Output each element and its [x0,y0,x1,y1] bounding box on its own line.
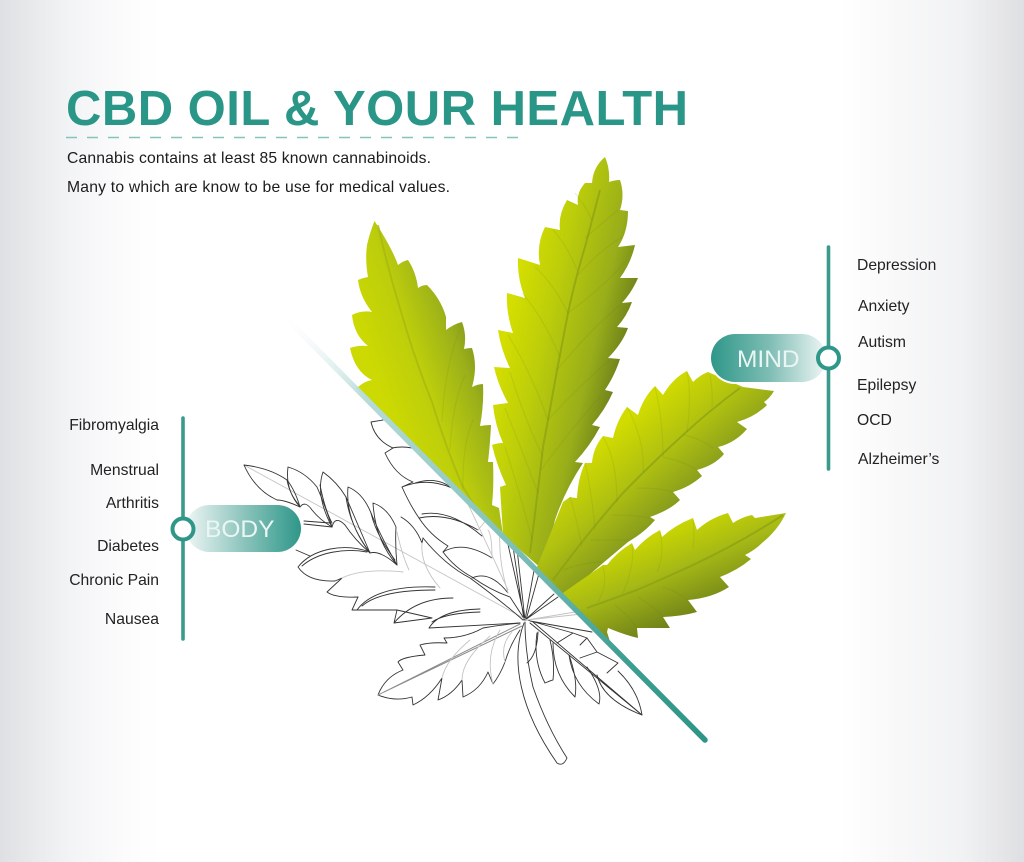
intro text: Cannabis contains at least 85 known cannabinoids. [67,150,431,167]
title: CBD OIL & YOUR HEALTH [66,82,688,136]
intro text [67,150,450,196]
mind conditions list: Epilepsy [857,377,916,394]
body conditions list: Chronic Pain [69,572,159,589]
leaf: upper left [350,221,503,535]
body pill [186,505,301,552]
mind axis line [827,247,830,469]
body conditions list: Nausea [105,611,159,628]
mind pill [709,332,828,384]
diagonal divider [280,312,705,740]
outline leaf: upper left [244,465,527,628]
body conditions list: Fibromyalgia [69,417,159,434]
illustration: outline half of cannabis leaf [244,420,642,764]
leaf: right upper [535,371,774,600]
body label: BODY [205,516,274,543]
mind conditions list: Alzheimer’s [858,451,940,468]
mind conditions list: Depression [857,257,936,274]
intro text: Many to which are know to be use for medical values. [67,179,450,196]
body conditions list: Diabetes [97,538,159,555]
mind conditions list: Anxiety [858,298,910,315]
mind group [709,247,940,469]
body conditions list: Arthritis [106,495,159,512]
outline leaf: lower left [378,623,522,705]
body group [69,417,301,639]
body conditions list [69,417,159,628]
outline leaf: lower right [527,612,642,715]
illustration: coloured half of cannabis leaf [350,157,786,648]
outline leaf: upper [371,420,558,620]
leaf: right lower [560,513,786,648]
leaf: centre [492,157,638,570]
mind conditions list: OCD [857,412,892,429]
mind conditions list: Autism [858,334,906,351]
body conditions list: Menstrual [90,462,159,479]
mind conditions list [857,257,940,468]
body node [172,518,194,540]
body axis line [181,418,185,639]
mind node [818,348,839,368]
outline leaf: stem [518,622,567,764]
mind label: MIND [737,346,800,373]
